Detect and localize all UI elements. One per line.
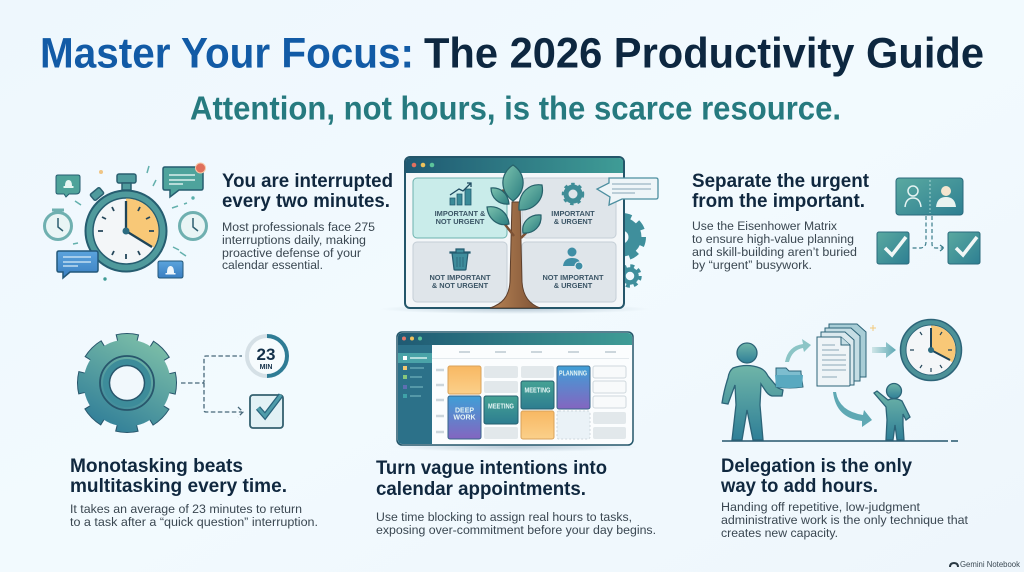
- icon: background gears: [601, 216, 643, 286]
- decorative motion marks: [73, 166, 187, 256]
- icon: bell bubble bottom: [158, 261, 183, 278]
- sparkle: [870, 325, 876, 331]
- body: delegation: administrative work is the only technique that: [721, 513, 969, 527]
- arrow: to helper: [833, 392, 872, 427]
- block: planning: PLANNING: [559, 370, 587, 378]
- heading: monotasking: multitasking every time.: [70, 476, 287, 497]
- body: time blocking: Use time blocking to assign real hours to tasks,: [376, 510, 632, 524]
- quadrant: not important and urgent: & URGENT: [554, 281, 593, 290]
- heading: separate: Separate the urgent: [692, 171, 870, 192]
- icon: small clock left: [44, 210, 72, 240]
- body: interruptions: calendar essential.: [222, 258, 323, 272]
- body: interruptions: Most professionals face 275: [222, 220, 375, 234]
- icon: 23 minute timer: 23: [257, 345, 275, 364]
- body: time blocking: exposing over-commitment before your day begins.: [376, 523, 656, 537]
- quadrant: not important and not urgent: NOT IMPORTANT: [429, 273, 491, 282]
- window frame: [397, 332, 633, 445]
- ground line: [722, 440, 958, 442]
- panel: interruptions: [44, 163, 393, 281]
- icon: stopwatch crown: [90, 174, 136, 201]
- block: deep work: WORK: [453, 414, 476, 422]
- body: interruptions: [222, 220, 375, 272]
- body: delegation: [721, 500, 969, 540]
- panel: time blocking: [376, 332, 656, 537]
- heading: interruptions: You are interrupted: [222, 171, 393, 192]
- icon: stopwatch with notifications: [44, 163, 206, 281]
- panel: separate urgent: [692, 171, 980, 272]
- icon: chat bubble top: [163, 163, 206, 197]
- arrow: to documents: [785, 339, 811, 362]
- body: separate: by “urgent” busywork.: [692, 258, 812, 272]
- block: planning: [557, 366, 590, 409]
- body: monotasking: It takes an average of 23 minutes to return: [70, 502, 302, 516]
- callout bubble: [597, 178, 658, 205]
- body: monotasking: [70, 502, 318, 529]
- heading: delegation: [720, 456, 912, 497]
- block: orange lower: [521, 411, 554, 439]
- panel: monotasking: [70, 336, 318, 529]
- icon: stopwatch body: [86, 190, 166, 272]
- icon: checkbox: [250, 395, 283, 428]
- icon: 23 minute timer: [247, 336, 287, 376]
- quadrant: important and not urgent: IMPORTANT &: [435, 209, 486, 218]
- heading: time blocking: Turn vague intentions into: [376, 458, 607, 479]
- title: Master Your Focus:: [40, 30, 414, 78]
- body: separate: to ensure high-value planning: [692, 232, 854, 246]
- heading: delegation: Delegation is the only: [721, 456, 912, 477]
- body: separate: and skill-building aren’t buried: [692, 245, 857, 259]
- icon: small clock right: [180, 212, 206, 240]
- panel: delegation: [720, 320, 969, 540]
- heading: separate: from the important.: [692, 191, 865, 212]
- quadrant: not important and not urgent: & NOT URGENT: [432, 281, 489, 290]
- quadrant: not important and urgent: NOT IMPORTANT: [542, 273, 604, 282]
- icon: bell bubble left: [56, 175, 80, 197]
- icon: helper figure: [874, 384, 910, 440]
- quadrant: not important and urgent: [522, 242, 616, 302]
- icon: gear: [83, 339, 171, 427]
- block: meeting two: MEETING: [524, 388, 551, 394]
- body: interruptions: interruptions daily, making: [222, 233, 366, 247]
- heading: time blocking: calendar appointments.: [376, 479, 586, 500]
- block: meeting two: [521, 381, 554, 409]
- heading: monotasking: [70, 456, 287, 497]
- body: monotasking: to a task after a “quick question” interruption.: [70, 515, 318, 529]
- title: [40, 30, 984, 78]
- heading: separate: [692, 171, 870, 212]
- heading: interruptions: [222, 171, 393, 212]
- heading: monotasking: Monotasking beats: [70, 456, 243, 477]
- subtitle: Attention, not hours, is the scarce resource.: [190, 90, 841, 126]
- icon: two person card and checkboxes: [877, 178, 980, 264]
- icon: documents stack: [817, 324, 866, 386]
- block: orange top: [448, 366, 481, 394]
- heading: time blocking: [376, 458, 607, 500]
- body: separate: Use the Eisenhower Matrix: [692, 219, 838, 233]
- quadrant: important and urgent: IMPORTANT: [551, 209, 595, 218]
- open slots: [557, 366, 626, 439]
- footer: Gemini Notebook mark: Gemini Notebook: [960, 560, 1021, 569]
- heading: delegation: way to add hours.: [720, 476, 878, 497]
- quadrant: important and urgent: [522, 178, 616, 238]
- sidebar items: [398, 353, 432, 398]
- icon: adult figure: [722, 343, 783, 440]
- title: The 2026 Productivity Guide: [424, 30, 984, 78]
- heading: interruptions: every two minutes.: [222, 191, 390, 212]
- icon: 23 minute timer: MIN: [260, 364, 272, 371]
- panel: Eisenhower matrix: [380, 157, 658, 314]
- empty slots: [484, 366, 626, 439]
- body: time blocking: [376, 510, 656, 537]
- icon: folder: [775, 368, 803, 388]
- icon: clock: [900, 320, 962, 380]
- arrow: to clock: [872, 342, 896, 358]
- quadrant: important and not urgent: NOT URGENT: [436, 217, 485, 226]
- body: interruptions: proactive defense of your: [222, 246, 361, 260]
- icon: tree: [487, 165, 542, 308]
- icon: chat bubble bottom: [57, 251, 98, 278]
- block: deep work: DEEP: [455, 408, 474, 414]
- window frame: [405, 157, 624, 308]
- body: delegation: Handing off repetitive, low-judgment: [721, 500, 921, 514]
- quadrant: important and not urgent: [413, 178, 507, 238]
- block: meeting one: MEETING: [488, 404, 514, 410]
- block: deep work: [448, 396, 481, 439]
- quadrant: important and urgent: & URGENT: [554, 217, 593, 226]
- calendar header: [432, 352, 629, 432]
- quadrant: not important and not urgent: [413, 242, 507, 302]
- arrow: dashed connectors: [181, 356, 243, 417]
- body: separate: [692, 219, 857, 272]
- block: meeting one: [484, 396, 518, 424]
- body: delegation: creates new capacity.: [721, 526, 838, 540]
